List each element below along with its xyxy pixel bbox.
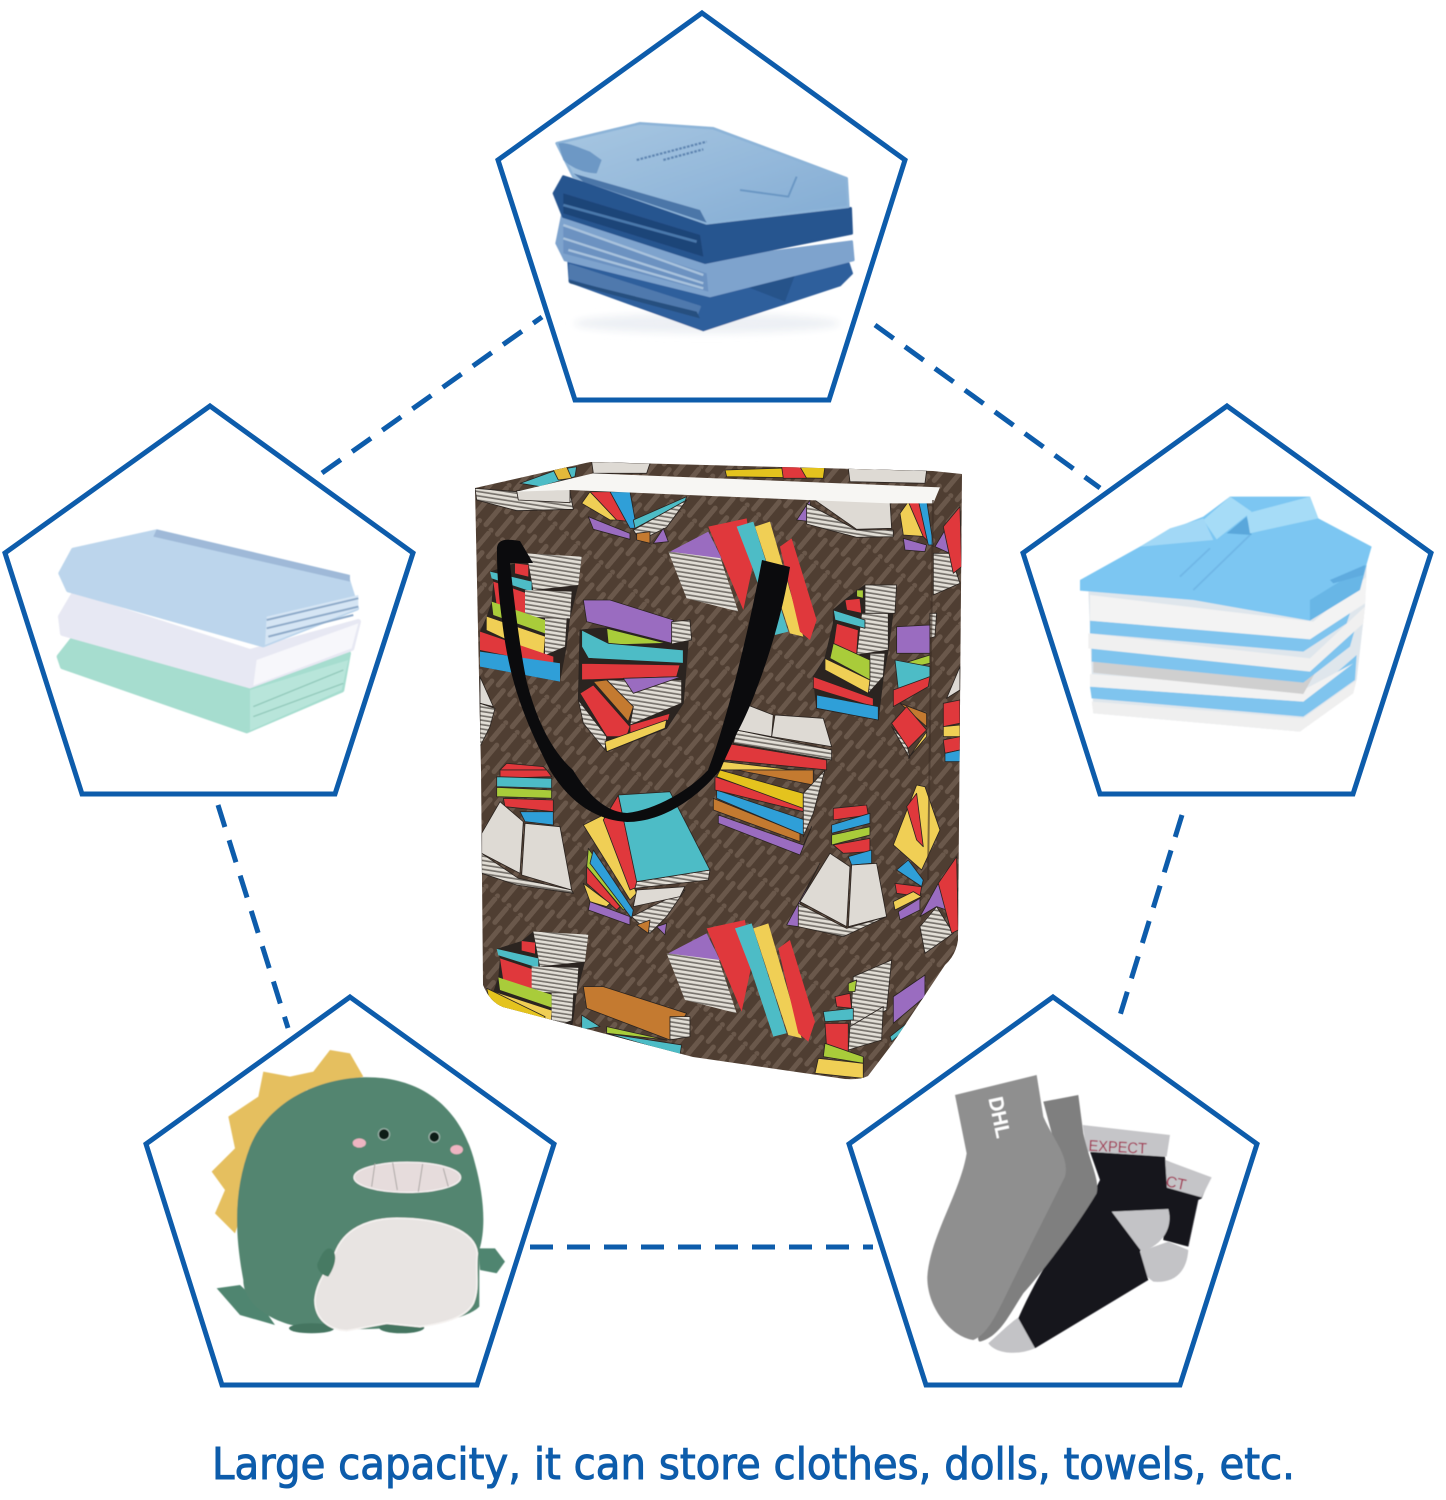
pentagon: socks (849, 997, 1257, 1385)
dashed connector: jeans to towels (322, 317, 542, 473)
stack of folded shirts (1080, 497, 1372, 732)
stack of folded towels (59, 529, 358, 731)
stack of folded jeans (554, 123, 853, 333)
laundry hamper with book pattern (470, 455, 970, 1085)
upper book pattern (475, 462, 962, 770)
caption: Large capacity, it can store clothes, dolls, towels, etc. (212, 1439, 1295, 1490)
dashed connector: shirts to socks (1117, 815, 1182, 1025)
pentagon: dinosaur plush (146, 997, 554, 1385)
dashed connector: plush to socks (530, 1244, 873, 1250)
side seam (928, 500, 933, 880)
pentagon: shirts (1023, 406, 1431, 794)
dashed connector: towels to plush (218, 805, 288, 1028)
dinosaur plush toy (212, 1050, 505, 1333)
two pairs of socks: EXPECT (1088, 1138, 1148, 1158)
black carry handle (497, 540, 790, 822)
inner white liner (517, 473, 940, 503)
dashed connector: jeans to shirts (875, 325, 1100, 488)
lower book pattern (482, 770, 958, 1078)
two pairs of socks: DHL (983, 1095, 1015, 1140)
pentagon: jeans (498, 13, 905, 400)
pentagon: towels (5, 406, 413, 794)
two pairs of socks: CT (1164, 1173, 1188, 1194)
two pairs of socks (927, 1075, 1212, 1353)
